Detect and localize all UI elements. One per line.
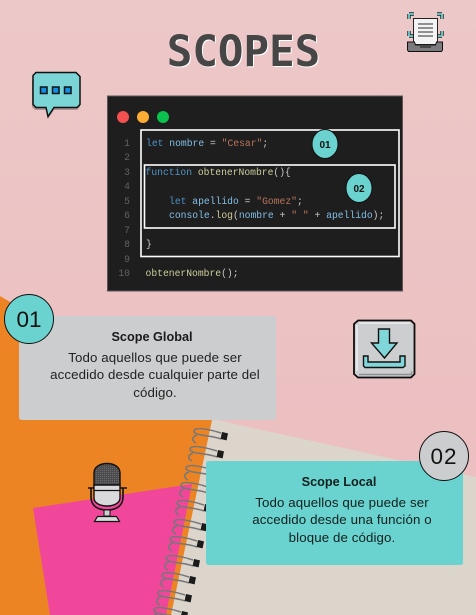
line numbers: 4 bbox=[124, 181, 130, 192]
code text: let nombre = "Cesar"; bbox=[146, 138, 268, 149]
line numbers: 6 bbox=[124, 210, 130, 221]
background: notebook cream page bbox=[170, 419, 476, 615]
icon: download button bbox=[354, 320, 414, 378]
line numbers: 5 bbox=[124, 196, 130, 207]
panel: scope local bbox=[206, 461, 463, 565]
title: SCOPES bbox=[167, 28, 320, 77]
badge: 02 small bbox=[346, 174, 372, 202]
text: scope local description: accedido desde una función o bbox=[252, 512, 432, 527]
line numbers: 7 bbox=[124, 225, 130, 236]
panel: scope global bbox=[19, 316, 276, 420]
line numbers: 3 bbox=[124, 167, 130, 178]
heading: scope local: Scope Local bbox=[302, 475, 376, 489]
badge: 02 large bbox=[420, 432, 468, 480]
icon: speech bubble bbox=[32, 72, 80, 119]
scope outline: local bbox=[144, 165, 395, 228]
title: SCOPES bbox=[168, 29, 321, 78]
notebook spiral binding bbox=[153, 429, 228, 615]
line numbers: 1 bbox=[124, 138, 130, 149]
code window bbox=[108, 96, 402, 291]
background: orange sheet bbox=[0, 296, 212, 615]
line numbers: 9 bbox=[124, 254, 130, 265]
code text: console.log(nombre + " " + apellido); bbox=[169, 210, 384, 221]
code text bbox=[146, 138, 384, 279]
background: pink sticky note bbox=[33, 484, 192, 615]
code text: } bbox=[146, 239, 152, 250]
line numbers: 10 bbox=[118, 268, 130, 279]
code text: let apellido = "Gomez"; bbox=[169, 196, 303, 207]
line numbers: 8 bbox=[124, 239, 130, 250]
window control dots bbox=[117, 111, 169, 123]
badge: 01 large bbox=[4, 294, 54, 344]
badge: 02 large: 02 bbox=[430, 444, 458, 469]
text: scope global description: accedido desde cualquier parte del bbox=[50, 367, 260, 382]
badge: 02 small: 02 bbox=[353, 184, 365, 195]
icon: document tray bbox=[408, 14, 442, 52]
badge: 01 large: 01 bbox=[16, 307, 42, 332]
code text: function obtenerNombre(){ bbox=[146, 167, 291, 178]
line numbers bbox=[118, 138, 130, 279]
badge: 01 small bbox=[312, 130, 338, 158]
text: scope global description: Todo aquellos que puede ser bbox=[68, 350, 242, 365]
scope outline: global bbox=[141, 130, 399, 256]
heading: scope global: Scope Global bbox=[111, 330, 193, 344]
badge: 01 small: 01 bbox=[319, 140, 331, 151]
code text: obtenerNombre(); bbox=[146, 268, 239, 279]
text: scope global description: código. bbox=[133, 385, 177, 400]
text: scope local description: Todo aquellos que puede ser bbox=[255, 495, 429, 510]
text: scope local description: bloque de código. bbox=[289, 530, 395, 545]
line numbers: 2 bbox=[124, 152, 130, 163]
icon: microphone bbox=[88, 464, 127, 522]
